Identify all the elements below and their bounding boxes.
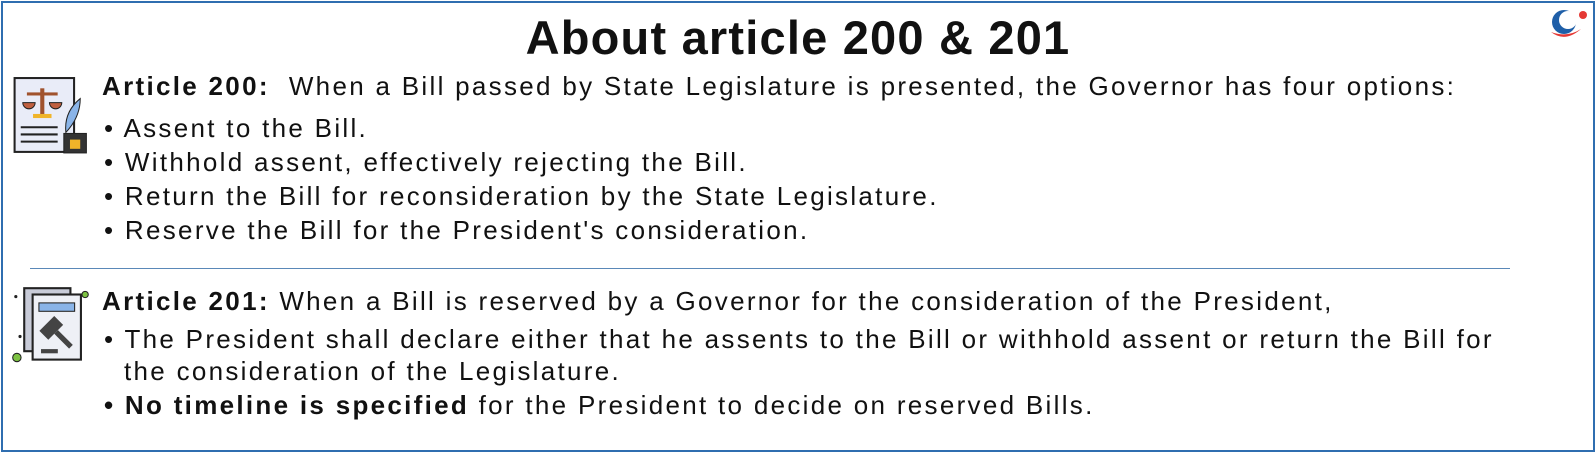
text: the consideration of the Legislature. — [124, 356, 621, 386]
text: • The President shall declare either that he assents to the Bill or withhold assent or return the Bill for — [104, 324, 1494, 354]
text: • Withhold assent, effectively rejecting the Bill. — [104, 147, 748, 177]
icon: gavel document — [12, 287, 89, 362]
text: article 201 — [102, 286, 1494, 420]
logo — [1551, 10, 1587, 37]
text: • Return the Bill for reconsideration by the State Legislature. — [104, 181, 939, 211]
text: article 200 — [102, 71, 1456, 245]
title: About article 200 & 201 — [526, 11, 1070, 64]
text: • Assent to the Bill. — [104, 113, 368, 143]
text: Article 200: When a Bill passed by State Legislature is presented, the Governor has four options: — [102, 71, 1456, 101]
text: • No timeline is specified for the President to decide on reserved Bills. — [104, 390, 1095, 420]
icon: law document — [14, 77, 87, 154]
text: Article 201: When a Bill is reserved by a Governor for the consideration of the President, — [102, 286, 1334, 316]
text: • Reserve the Bill for the President's consideration. — [104, 215, 809, 245]
